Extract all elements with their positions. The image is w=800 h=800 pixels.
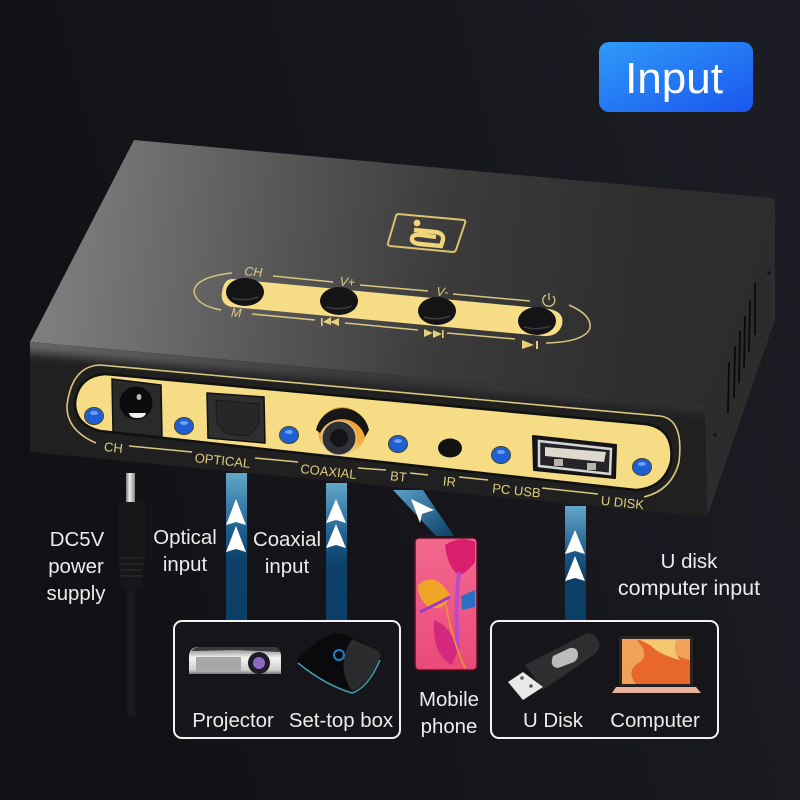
- optical port: [207, 393, 265, 443]
- USB port: [533, 436, 616, 478]
- button 2: [320, 287, 358, 315]
- label: optical input: Optical: [153, 527, 217, 549]
- IR window: [438, 438, 462, 458]
- control strip with buttons: V+: [339, 274, 356, 290]
- logo badge: [388, 214, 465, 252]
- control strip with buttons: CH: [244, 264, 264, 280]
- connector panel outline: [67, 365, 680, 497]
- control strip with buttons: V-: [436, 285, 449, 300]
- top edge highlight: [20, 343, 715, 406]
- label: projector: Projector: [192, 710, 274, 732]
- connector panel: [75, 374, 671, 490]
- button 1: [226, 278, 264, 306]
- panel: U disk and computer: [491, 621, 718, 738]
- label: U disk: U Disk: [523, 710, 584, 732]
- side screws: [713, 271, 771, 437]
- panel labels: BT: [389, 468, 408, 485]
- button 3: [418, 297, 456, 325]
- input badge: Input: [625, 54, 723, 103]
- label: DC5V power supply: power: [48, 556, 104, 578]
- label: U disk computer input: U disk: [661, 551, 718, 573]
- DC power jack: [112, 379, 162, 437]
- arrow: bluetooth to phone: [393, 490, 454, 536]
- arrow: optical input: [226, 473, 247, 620]
- icon: mobile phone: [415, 538, 477, 670]
- label: DC5V power supply: DC5V: [50, 529, 105, 551]
- panel labels: [103, 439, 645, 512]
- device front face: [30, 342, 707, 517]
- arrow: coaxial input: [326, 483, 347, 620]
- side vents: [728, 283, 755, 413]
- panel labels: U DISK: [600, 493, 645, 512]
- label: U disk computer input: computer input: [618, 576, 760, 600]
- LED indicators: [84, 408, 652, 476]
- input badge: [599, 42, 753, 112]
- label: mobile phone: Mobile: [419, 689, 479, 711]
- coaxial port: [316, 407, 369, 455]
- device top face: [30, 140, 775, 403]
- control strip with buttons: [194, 264, 590, 349]
- device: audio converter box: [20, 140, 775, 517]
- control strip with buttons: M: [231, 306, 243, 320]
- label: DC5V power supply: [47, 529, 106, 605]
- button 4: [518, 307, 556, 335]
- label: coaxial input: Coaxial: [253, 529, 321, 551]
- icon: projector: [189, 647, 281, 674]
- icon: computer: [612, 636, 701, 693]
- panel labels: PC USB: [492, 481, 541, 501]
- icon: set-top box: [297, 633, 381, 693]
- label: coaxial input: input: [265, 556, 309, 578]
- label: coaxial input: [253, 529, 321, 578]
- label: U disk computer input: [618, 551, 760, 600]
- arrow: USB input: [565, 506, 586, 620]
- panel labels: IR: [442, 473, 457, 490]
- label: DC5V power supply: supply: [47, 583, 106, 605]
- label: set-top box: Set-top box: [289, 710, 393, 732]
- label: mobile phone: phone: [421, 716, 477, 738]
- panel labels: COAXIAL: [300, 461, 357, 482]
- device side face: [705, 200, 775, 517]
- label: optical input: [153, 527, 217, 576]
- label: computer: Computer: [610, 710, 700, 732]
- label: mobile phone: [419, 689, 479, 738]
- panel labels: CH: [103, 439, 124, 456]
- panel label line: [129, 446, 598, 494]
- power plug cable: [118, 473, 145, 717]
- panel labels: OPTICAL: [194, 450, 251, 471]
- panel: projector and set-top box: [174, 621, 400, 738]
- label: optical input: input: [163, 554, 207, 576]
- icon: U disk: [508, 633, 600, 700]
